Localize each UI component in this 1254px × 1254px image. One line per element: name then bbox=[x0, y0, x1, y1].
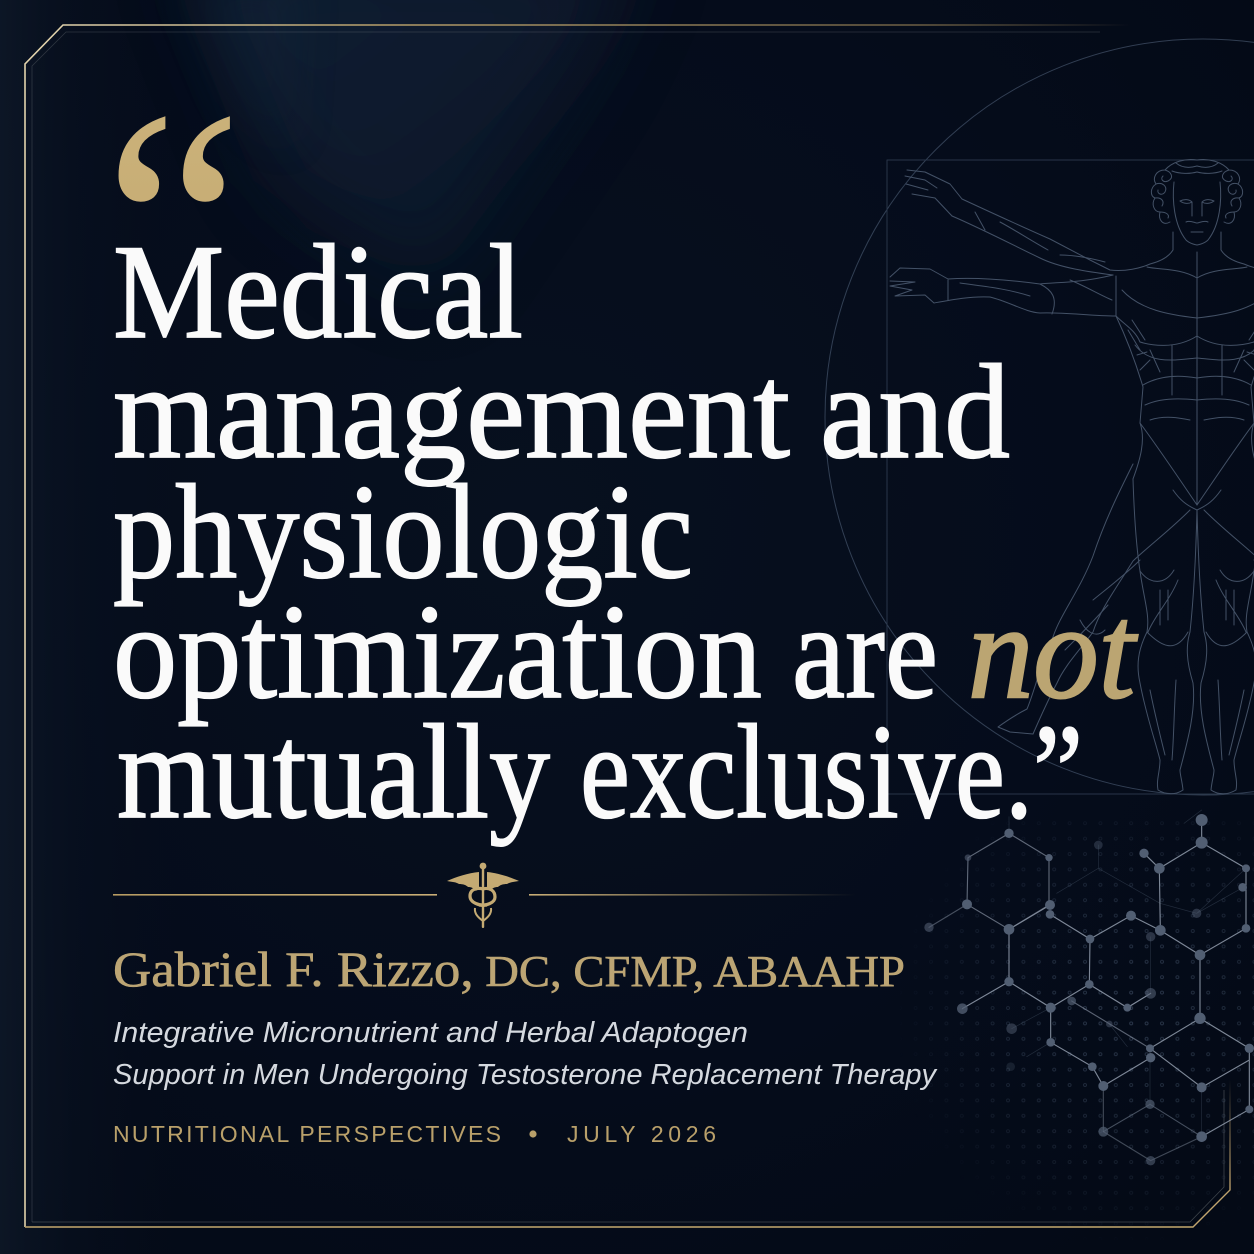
Vitruvian circle bbox=[825, 39, 1254, 795]
author name: Gabriel F. Rizzo, DC, CFMP, ABAAHP bbox=[113, 941, 905, 997]
article title bbox=[113, 1017, 937, 1091]
line 5: exclusive: exclusive.” bbox=[580, 698, 1083, 847]
divider left bbox=[113, 894, 437, 896]
separator dot bbox=[529, 1130, 537, 1138]
divider right bbox=[529, 894, 855, 896]
bright bonds bbox=[929, 820, 1249, 1161]
background dot grid bbox=[930, 822, 1254, 1210]
publication line bbox=[113, 1121, 716, 1147]
emphasised word: not bbox=[968, 578, 1138, 727]
line 5: mutually: mutually bbox=[117, 698, 550, 847]
quote headline bbox=[113, 218, 1138, 847]
title line 2: Support in Men Undergoing Testosterone Replacement Therapy bbox=[113, 1059, 937, 1091]
icon: caduceus bbox=[447, 863, 519, 928]
atom nodes bbox=[924, 814, 1254, 1165]
journal: NUTRITIONAL PERSPECTIVES bbox=[113, 1121, 501, 1147]
line 3: physiologic bbox=[113, 458, 693, 607]
molecular hexagon network bbox=[924, 810, 1254, 1165]
line 4: optimization: optimization bbox=[113, 578, 762, 727]
date: JULY 2026 bbox=[567, 1121, 716, 1147]
faint back bonds bbox=[1009, 810, 1246, 1137]
line 4: are: are bbox=[792, 578, 938, 727]
figure center line bbox=[1196, 252, 1198, 505]
figure mirrored half bbox=[1197, 159, 1254, 794]
line 2: management: management bbox=[113, 338, 790, 487]
figure half bbox=[890, 159, 1197, 794]
title line 1: Integrative Micronutrient and Herbal Adaptogen bbox=[113, 1017, 748, 1049]
line 2: and: and bbox=[820, 338, 1010, 487]
line 1: Medical bbox=[113, 218, 523, 367]
Vitruvian man line illustration bbox=[825, 39, 1254, 795]
opening quotation mark: “ bbox=[104, 42, 243, 411]
Vitruvian square bbox=[887, 160, 1254, 794]
